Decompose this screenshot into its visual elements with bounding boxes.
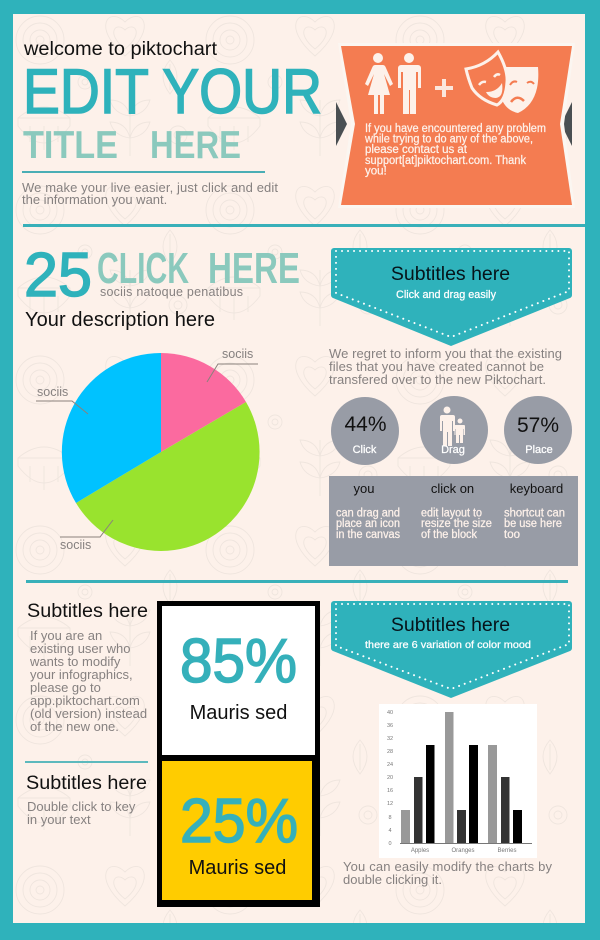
column: keyboard: be use here bbox=[504, 518, 562, 530]
ribbon caption: there are 6 variation of color mood bbox=[365, 639, 531, 651]
icon: man bbox=[398, 53, 421, 114]
column: you: in the canvas bbox=[336, 529, 400, 541]
stat box: 85% bbox=[162, 606, 315, 755]
banner text: please contact us at bbox=[365, 144, 468, 156]
header description: We make your live easier, just click and edit bbox=[22, 180, 278, 195]
column: click on: of the block bbox=[421, 529, 477, 541]
paragraph: of the new one. bbox=[30, 719, 119, 734]
icon: theatre masks bbox=[466, 52, 538, 113]
click here heading: CLICK bbox=[97, 244, 189, 293]
paragraph: wants to modify bbox=[29, 654, 121, 669]
pie label left bbox=[36, 385, 88, 414]
icon: plus bbox=[435, 79, 453, 97]
stat circle: drag: Drag bbox=[441, 444, 465, 456]
arrow: left notch bbox=[336, 102, 347, 146]
column: click on: resize the size bbox=[421, 518, 492, 530]
y axis labels: 4 bbox=[388, 828, 392, 834]
y axis labels bbox=[387, 710, 393, 847]
title: title here: TITLE bbox=[23, 124, 118, 167]
column: click on: click on bbox=[431, 481, 474, 496]
pie chart bbox=[36, 347, 260, 552]
paragraph: regret notice: files that you have created cannot be bbox=[329, 359, 544, 374]
ribbon heading: Subtitles here bbox=[391, 263, 510, 285]
x axis labels bbox=[411, 848, 517, 854]
bars: oranges bbox=[445, 712, 478, 843]
panel: grey three-column table bbox=[329, 476, 578, 566]
x axis labels: Apples bbox=[411, 848, 429, 854]
y axis labels: 8 bbox=[388, 815, 392, 821]
column: you: place an icon bbox=[336, 518, 400, 530]
panel: orange contact banner bbox=[336, 43, 575, 208]
bars: berries bbox=[488, 745, 522, 843]
y axis labels: 40 bbox=[387, 710, 393, 716]
paragraph: Double click to key bbox=[27, 799, 136, 814]
pie label top right: sociis bbox=[222, 347, 253, 361]
panel: left text column bottom bbox=[26, 772, 147, 827]
pie label top right bbox=[207, 347, 258, 382]
bars: apples bbox=[401, 745, 434, 843]
pie label bottom: sociis bbox=[60, 538, 91, 552]
sub caption: sociis natoque penatibus bbox=[100, 285, 243, 299]
stat circle: place: Place bbox=[525, 444, 553, 456]
stat circle: drag bbox=[420, 396, 488, 464]
column: click on: edit layout to bbox=[421, 508, 482, 520]
pie label bottom bbox=[60, 520, 113, 552]
panel: left text column top bbox=[27, 600, 151, 734]
y axis labels: 20 bbox=[387, 775, 393, 781]
stat circle: place bbox=[504, 396, 572, 464]
paragraph: your infographics, bbox=[30, 667, 133, 682]
click here heading: HERE bbox=[208, 244, 300, 293]
stat box: 25%: 25% bbox=[180, 787, 298, 856]
ribbon caption: Click and drag easily bbox=[396, 289, 496, 301]
y axis labels: 0 bbox=[388, 841, 392, 847]
ribbon heading: Subtitles here bbox=[391, 614, 510, 636]
paragraph: regret notice: transfered over to the new Piktochart. bbox=[329, 372, 546, 387]
column: you: can drag and bbox=[336, 508, 400, 520]
stat box: 25% bbox=[162, 761, 312, 900]
y axis labels: 12 bbox=[387, 801, 393, 807]
paragraph: please go to bbox=[30, 680, 101, 695]
banner text: while trying to do any of the above, bbox=[364, 134, 533, 146]
y axis labels: 28 bbox=[387, 749, 393, 755]
paragraph: (old version) instead bbox=[30, 706, 147, 721]
title: title here: HERE bbox=[150, 124, 241, 167]
paragraph: regret notice: We regret to inform you that the existing bbox=[329, 346, 562, 361]
banner text: support[at]piktochart.com. Thank bbox=[365, 155, 526, 167]
arrow: right notch bbox=[561, 102, 572, 146]
panel: subtitle ribbon 2 bbox=[331, 601, 572, 698]
y axis labels: 16 bbox=[387, 788, 393, 794]
stat box: 25%: Mauris sed bbox=[189, 857, 286, 879]
paragraph: app.piktochart.com bbox=[30, 693, 140, 708]
panel: stacked stat boxes bbox=[157, 601, 320, 907]
stat circle: click: Click bbox=[353, 444, 377, 456]
x axis labels: Oranges bbox=[451, 848, 475, 854]
y axis labels: 24 bbox=[387, 762, 393, 768]
stat circle: place: 57% bbox=[517, 414, 559, 437]
column: keyboard: too bbox=[504, 529, 520, 541]
paragraph: existing user who bbox=[30, 641, 130, 656]
paragraph: in your text bbox=[27, 812, 91, 827]
banner text: If you have encountered any problem bbox=[365, 123, 546, 135]
icon: woman bbox=[365, 53, 393, 114]
paragraph: If you are an bbox=[30, 628, 102, 643]
chart caption: You can easily modify the charts by bbox=[343, 859, 552, 874]
subtitle: Subtitles here bbox=[26, 772, 147, 794]
banner text: you! bbox=[365, 166, 387, 178]
column: keyboard: keyboard bbox=[510, 481, 563, 496]
big number 25: 25 bbox=[24, 241, 92, 310]
stat box: 85%: Mauris sed bbox=[190, 702, 287, 724]
column: keyboard: shortcut can bbox=[504, 508, 565, 520]
header description: the information you want. bbox=[22, 192, 167, 207]
welcome line: welcome to piktochart bbox=[23, 39, 218, 60]
pie label left: sociis bbox=[37, 385, 68, 399]
y axis labels: 32 bbox=[387, 736, 393, 742]
column: you: you bbox=[354, 481, 374, 496]
title: edit your: EDIT YOUR bbox=[23, 57, 322, 127]
panel: header bbox=[22, 39, 322, 207]
stat circle: click: 44% bbox=[344, 413, 387, 436]
bar chart bbox=[379, 704, 537, 858]
subtitle: Subtitles here bbox=[27, 600, 148, 622]
panel: pie section heading bbox=[24, 241, 300, 331]
stat circle: click bbox=[331, 397, 399, 465]
y axis labels: 36 bbox=[387, 723, 393, 729]
description heading: Your description here bbox=[25, 309, 215, 331]
column: keyboard bbox=[504, 481, 568, 541]
x axis labels: Berries bbox=[497, 848, 517, 854]
stat box: 85%: 85% bbox=[180, 627, 297, 696]
column: click on bbox=[421, 481, 495, 541]
panel: subtitle ribbon 1 bbox=[331, 248, 572, 346]
chart caption: double clicking it. bbox=[343, 872, 442, 887]
column: you bbox=[336, 481, 403, 541]
